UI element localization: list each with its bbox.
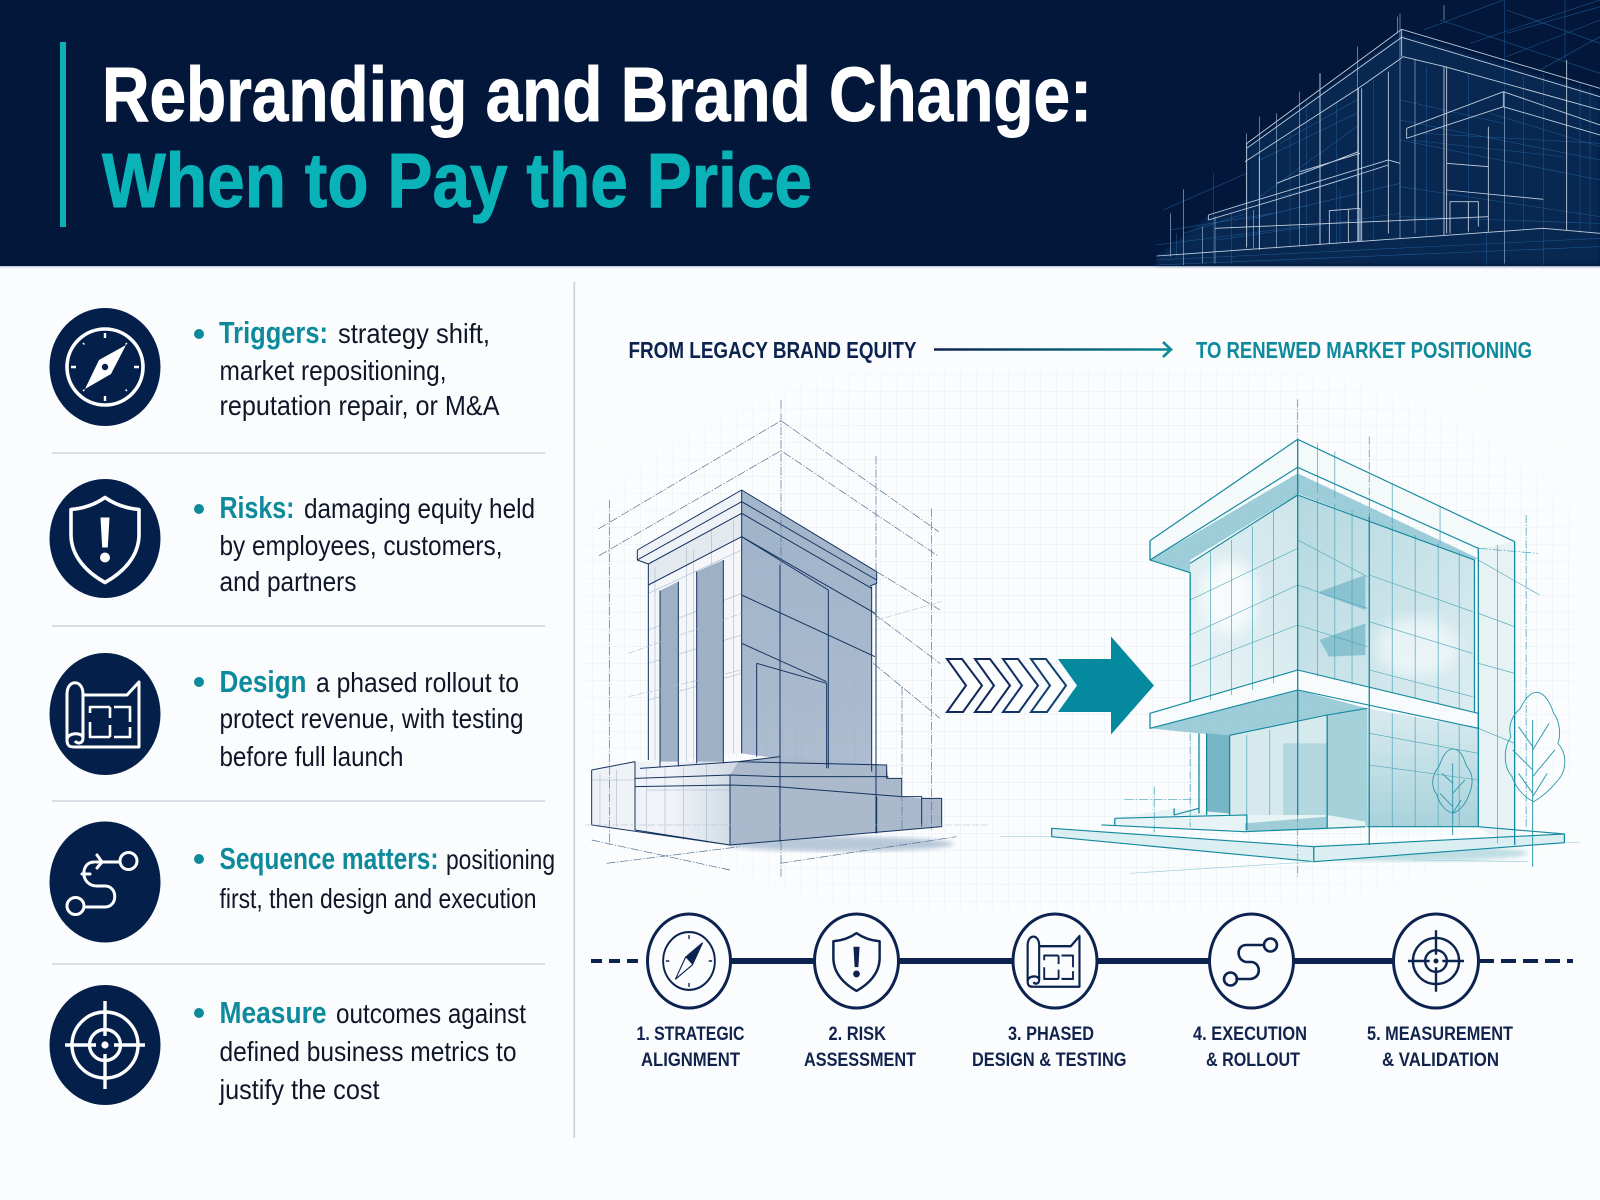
item: sequence: first, then design and execution [220,883,536,914]
item: triggers [50,308,500,426]
item: triggers: strategy shift, [338,318,490,349]
icon: compass [50,308,160,426]
icon: target [50,985,160,1105]
icon: shield [50,479,160,598]
icon: blueprint [50,653,160,775]
step 3 phased design and testing: DESIGN & TESTING [972,1050,1126,1071]
icon: shield [814,914,898,1008]
item: risks [50,479,535,598]
step 4 execution and rollout [1193,914,1307,1071]
item: risks: and partners [220,566,356,597]
item: measure [50,985,526,1105]
icon: route [50,822,160,942]
item: risks: Risks: [220,490,294,525]
item: risks: by employees, customers, [220,530,502,561]
arrow: from legacy to renewed [934,342,1171,357]
step 3 phased design and testing: 3. PHASED [1008,1024,1094,1045]
item: measure: Measure [220,995,326,1030]
step 2 risk assessment: 2. RISK [828,1024,886,1045]
item: risks: damaging equity held [304,493,535,524]
title line 1: Rebranding and Brand Change: [102,52,1092,138]
icon: route [1210,914,1294,1008]
item: design: a phased rollout to [316,667,519,698]
step 2 risk assessment: ASSESSMENT [804,1050,916,1071]
item: measure: outcomes against [336,998,526,1029]
item: sequence [50,822,555,942]
item: measure: justify the cost [219,1074,380,1105]
step 4 execution and rollout: & ROLLOUT [1206,1050,1300,1071]
item: sequence: positioning [446,844,555,875]
step 1 strategic alignment: ALIGNMENT [641,1050,740,1071]
step 2 risk assessment [804,914,916,1071]
icon: target [1394,914,1478,1008]
step 4 execution and rollout: 4. EXECUTION [1193,1024,1307,1045]
panel: key points [50,308,555,1105]
item: design: before full launch [220,741,404,772]
item: design: Design [220,664,306,699]
title accent bar [60,42,66,227]
step 5 measurement and validation: & VALIDATION [1382,1050,1499,1071]
item: measure: defined business metrics to [220,1036,516,1067]
header building wireframe [1157,0,1600,265]
step 1 strategic alignment: 1. STRATEGIC [636,1024,745,1045]
renewed building illustration [1000,399,1580,877]
item: design: protect revenue, with testing [220,703,524,734]
process timeline [591,914,1573,1071]
icon: compass [648,914,730,1008]
title line 2: When to Pay the Price [102,138,812,224]
step 5 measurement and validation: 5. MEASUREMENT [1367,1024,1513,1045]
header banner [0,0,1600,268]
step 5 measurement and validation [1367,914,1513,1071]
item: triggers: Triggers: [219,315,328,350]
step 1 strategic alignment [636,914,745,1071]
trees [1433,692,1565,867]
step 3 phased design and testing [972,914,1126,1071]
item: triggers: reputation repair, or M&A [220,390,500,421]
item: triggers: market repositioning, [220,355,446,386]
blueprint grid background [585,370,1575,910]
transformation heading [628,337,1532,363]
arrow: chevrons to solid transition [947,636,1154,734]
legacy building illustration [585,400,990,877]
item: design [50,653,524,775]
item: sequence: Sequence matters: [220,841,438,876]
transformation heading: FROM LEGACY BRAND EQUITY [628,337,916,363]
icon: blueprint [1013,914,1097,1008]
